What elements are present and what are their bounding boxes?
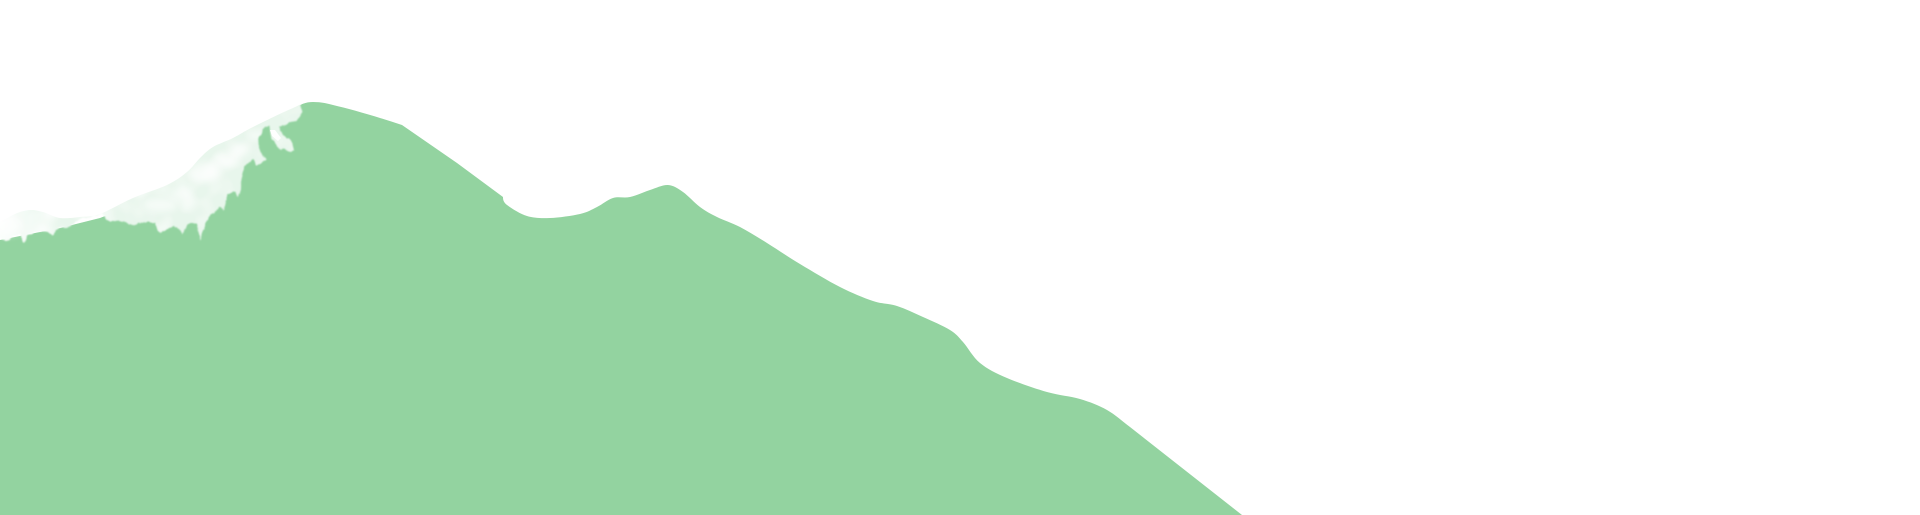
illustration: snow-capped green mountain <box>0 102 1242 515</box>
snow: patch highlight <box>270 130 281 141</box>
snow: main drift with patch <box>0 95 303 244</box>
mountain silhouette <box>0 102 1242 515</box>
snow: white highlights <box>0 143 250 235</box>
snow cap <box>0 95 303 244</box>
